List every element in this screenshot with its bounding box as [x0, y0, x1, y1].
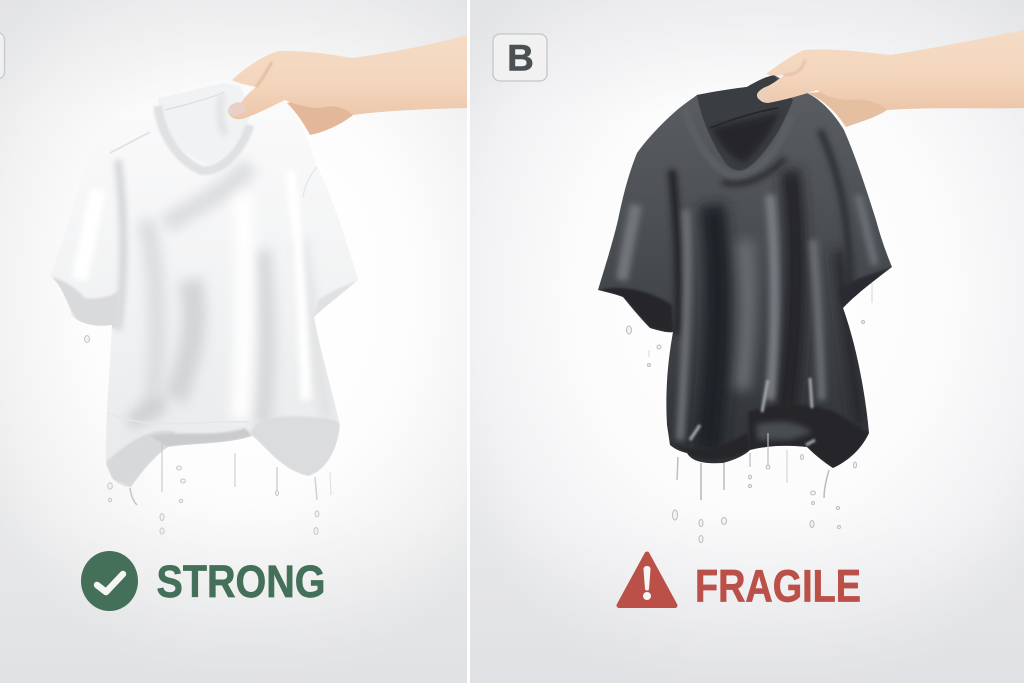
shirt body: [50, 83, 358, 487]
inner shadow: [712, 112, 780, 162]
icon: check circle: [81, 551, 138, 611]
panel: right background: [470, 0, 1024, 683]
finger crease: [256, 62, 272, 87]
thumb nail: [226, 100, 248, 118]
neck seam: [710, 108, 778, 128]
shirt body: [598, 75, 892, 468]
status: strong: [81, 551, 326, 611]
arm and upper hand: [228, 35, 467, 119]
hand holding shirt: [226, 35, 467, 135]
icon: warning triangle: [619, 554, 675, 606]
sleeve seam: [303, 167, 317, 197]
label: STRONG: STRONG: [156, 556, 326, 607]
panel: strong option: [0, 32, 467, 611]
status: fragile: [619, 554, 861, 612]
collar shadow: [722, 158, 785, 184]
hand holding shirt: [756, 30, 1024, 127]
badge: option B: [493, 34, 547, 81]
inner fold: [220, 95, 226, 135]
inner neck: [697, 75, 793, 171]
collar band: [158, 106, 250, 171]
panel divider: [467, 0, 470, 683]
collar: [684, 75, 793, 184]
badge: option A, cropped: [0, 32, 4, 79]
shirt fold shading: [52, 160, 358, 487]
lower palm: [287, 95, 353, 135]
water drips: [84, 336, 331, 534]
shirt fold shading: [598, 130, 892, 468]
badge: option B: B: [507, 38, 534, 78]
collar: [158, 83, 252, 171]
dark wet t-shirt: [598, 75, 892, 468]
neck seam: [165, 92, 225, 110]
lower palm: [807, 90, 887, 127]
shoulder seam: [110, 132, 150, 153]
white wet t-shirt: [50, 83, 358, 487]
inner neck: [158, 83, 252, 163]
water drips: [626, 283, 872, 542]
thumb nail: [756, 88, 772, 102]
panel: fragile option: [493, 30, 1024, 612]
finger crease: [784, 60, 805, 75]
label: FRAGILE: FRAGILE: [695, 560, 861, 612]
panel: left background: [0, 0, 467, 683]
arm and upper hand: [757, 30, 1024, 110]
collar band: [684, 108, 792, 176]
